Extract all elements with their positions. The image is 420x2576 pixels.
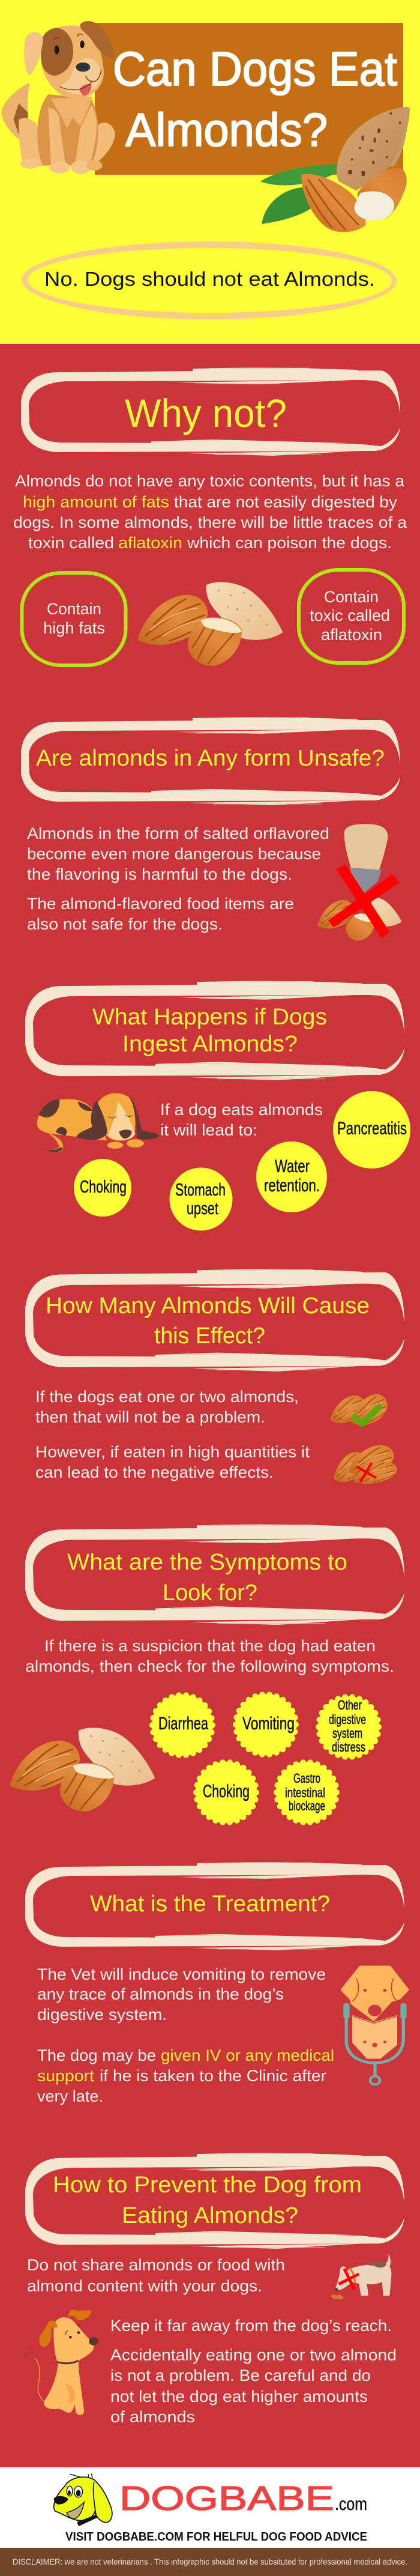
heading: what happens: What Happens if Dogs xyxy=(92,1005,327,1030)
heading: unsafe forms: Are almonds in Any form Unsafe? xyxy=(36,746,385,771)
icon: sitting dog xyxy=(1,21,115,174)
icon: three almonds xyxy=(137,582,283,666)
callout: water retention: Water xyxy=(275,1156,310,1176)
badge: choking: Choking xyxy=(203,1782,250,1801)
icon: vet stethoscope with pets xyxy=(342,1967,407,2084)
badge: gastro intestinal blockage: Gastro xyxy=(293,1771,320,1786)
text block: flavored almonds: become even more dangerous because xyxy=(27,845,321,863)
icon: crossed salt shaker and almonds xyxy=(317,824,402,941)
text block: do not share: Do not share almonds or food with xyxy=(27,2256,285,2274)
text block: do not share: almond content with your dogs. xyxy=(27,2277,262,2295)
text block: flavored almonds: The almond-flavored food items are xyxy=(27,895,294,913)
text block: flavored almonds: Almonds in the form of salted orflavored xyxy=(27,824,329,842)
callout: contain toxic called aflatoxin: toxic called xyxy=(310,606,390,624)
heading: what happens: Ingest Almonds? xyxy=(122,1032,298,1057)
title text: Can Dogs Eat xyxy=(113,42,397,95)
heading: why not: Why not? xyxy=(125,391,287,435)
text block: keep away: not let the dog eat higher amounts xyxy=(110,2387,368,2405)
tagline: VISIT DOGBABE.COM FOR HELFUL DOG FOOD ADVICE xyxy=(65,2530,367,2544)
icon: almonds with green check xyxy=(330,1394,388,1426)
icon: dog sniffing almonds with cross xyxy=(331,2254,391,2299)
icon: almonds with red cross xyxy=(334,1445,397,1484)
callout: stomach upset: upset xyxy=(187,1199,218,1218)
heading: treatment: What is the Treatment? xyxy=(90,1891,330,1917)
heading: prevention: Eating Almonds? xyxy=(122,2203,298,2228)
callout: contain high fats xyxy=(22,573,126,665)
text block: treatment: any trace of almonds in the dog’s xyxy=(37,1985,284,2003)
icon: three almonds xyxy=(10,1728,155,1812)
text block: one or two almonds: then that will not be a problem. xyxy=(35,1408,265,1426)
text block: if a dog eats almonds: it will lead to: xyxy=(160,1121,257,1139)
callout: stomach upset: Stomach xyxy=(175,1181,226,1200)
text block: one or two almonds: If the dogs eat one or two almonds, xyxy=(35,1388,299,1406)
text block: why not explanation: dogs. In some almonds, there will be little traces of a xyxy=(13,513,407,531)
panel: treatment xyxy=(25,1862,407,2105)
panel: how many almonds xyxy=(25,1269,404,1484)
panel: unsafe forms xyxy=(21,717,402,941)
text block: treatment: The dog may be xyxy=(37,2046,156,2064)
icon: sitting dog with collar xyxy=(26,2310,98,2415)
heading: unsafe forms xyxy=(21,717,400,805)
text block: treatment: if he is taken to the Clinic after xyxy=(100,2067,326,2085)
header panel xyxy=(0,0,420,344)
heading: treatment xyxy=(25,1862,404,1950)
badge: choking xyxy=(196,1762,257,1823)
heading: symptoms xyxy=(25,1525,404,1625)
title text xyxy=(113,42,397,156)
heading: why not xyxy=(21,367,400,456)
text block: symptoms intro: almonds, then check for the following symptoms. xyxy=(25,1657,394,1675)
title banner xyxy=(95,23,403,175)
text block: flavored almonds: the flavoring is harmful to the dogs. xyxy=(27,865,292,883)
callout: pancreatitis xyxy=(333,1091,410,1169)
text block: if a dog eats almonds: If a dog eats almonds xyxy=(160,1101,323,1119)
text block: why not explanation: toxin called xyxy=(28,534,114,552)
text block: treatment xyxy=(37,1965,334,2105)
logo wordmark: .com xyxy=(335,2494,367,2514)
callout: choking: Choking xyxy=(80,1178,127,1197)
text block: why not explanation: high amount of fats xyxy=(23,493,169,511)
heading: how many almonds: How Many Almonds Will Cause xyxy=(46,1293,370,1319)
badge: other digestive system distress: Other xyxy=(338,1698,362,1713)
answer callout oval: No. Dogs should not eat Almonds. xyxy=(44,268,375,290)
heading: symptoms: Look for? xyxy=(163,1580,257,1606)
badge: other digestive system distress: digestive xyxy=(329,1712,366,1727)
logo wordmark: DOGBABE xyxy=(119,2479,334,2518)
panel: symptoms xyxy=(10,1525,404,1823)
badge: diarrhea: Diarrhea xyxy=(158,1714,208,1734)
badge: diarrhea xyxy=(152,1695,213,1756)
callout: contain toxic called aflatoxin: aflatoxin xyxy=(321,626,382,644)
title text: Almonds? xyxy=(125,103,328,156)
heading: what happens xyxy=(25,981,404,1080)
text block: if a dog eats almonds xyxy=(160,1101,323,1139)
text block: why not explanation: aflatoxin xyxy=(118,534,182,552)
text block: why not explanation: which can poison the dogs. xyxy=(187,534,392,552)
text block: treatment: support xyxy=(37,2067,95,2085)
text block: keep away: of almonds xyxy=(110,2408,195,2426)
callout: contain toxic called aflatoxin xyxy=(299,570,404,663)
panel: what happens xyxy=(25,981,410,1231)
icon: yellow dog logo xyxy=(54,2474,112,2526)
text block: high quantities xyxy=(35,1443,310,1481)
callout: water retention xyxy=(256,1141,327,1212)
heading: prevention: How to Prevent the Dog from xyxy=(53,2172,362,2198)
badge: other digestive system distress xyxy=(318,1696,379,1758)
text block: symptoms intro: If there is a suspicion that the dog had eaten xyxy=(44,1637,376,1655)
heading: symptoms: What are the Symptoms to xyxy=(67,1550,347,1575)
text block: do not share xyxy=(27,2256,285,2295)
text block: keep away: Keep it far away from the dog’s reach. xyxy=(110,2317,392,2335)
text block: treatment: given IV or any medical xyxy=(161,2046,334,2064)
text block: keep away: is not a problem. Be careful and do xyxy=(110,2366,371,2384)
text block: keep away xyxy=(110,2317,397,2426)
text block: high quantities: can lead to the negative effects. xyxy=(35,1463,274,1481)
heading: how many almonds: this Effect? xyxy=(154,1323,265,1349)
text block: high quantities: However, if eaten in high quantities it xyxy=(35,1443,310,1461)
badge: gastro intestinal blockage: intestinal xyxy=(285,1785,325,1800)
text block: symptoms intro xyxy=(25,1637,394,1675)
badge: gastro intestinal blockage: blockage xyxy=(289,1798,325,1813)
icon: almonds and leaves xyxy=(260,107,410,232)
badge: gastro intestinal blockage xyxy=(276,1762,337,1823)
callout: choking xyxy=(74,1159,131,1217)
answer callout oval xyxy=(22,241,397,319)
panel: why not xyxy=(13,367,407,666)
badge: other digestive system distress: distress xyxy=(332,1740,365,1755)
panel: prevention xyxy=(25,2153,404,2426)
badge: vomiting xyxy=(235,1694,296,1755)
icon: sleeping dog xyxy=(37,1093,160,1152)
text block: why not explanation: Almonds do not have any toxic contents, but it has a xyxy=(15,472,405,490)
text block: why not explanation: that are not easily digested by xyxy=(174,493,398,511)
callout: contain toxic called aflatoxin: Contain xyxy=(324,588,379,606)
footer: brand band xyxy=(0,2467,420,2548)
callout: stomach upset xyxy=(169,1167,233,1231)
disclaimer bar xyxy=(0,2548,420,2576)
callout: water retention: retention. xyxy=(264,1176,320,1196)
callout: contain high fats: high fats xyxy=(43,619,105,637)
text block: flavored almonds: also not safe for the dogs. xyxy=(27,915,223,933)
text block: treatment: The Vet will induce vomiting to remove xyxy=(37,1965,326,1983)
text block: flavored almonds xyxy=(27,824,329,933)
text block: treatment: very late. xyxy=(37,2087,103,2105)
text block: treatment: digestive system. xyxy=(37,2006,167,2024)
callout: contain high fats: Contain xyxy=(47,600,101,618)
text block: keep away: Accidentally eating one or two almond xyxy=(110,2346,397,2364)
badge: vomiting: Vomiting xyxy=(242,1714,295,1734)
heading: how many almonds xyxy=(25,1269,404,1371)
logo wordmark xyxy=(119,2479,367,2518)
heading: prevention xyxy=(25,2153,404,2249)
badge: other digestive system distress: system xyxy=(332,1726,362,1741)
text block: why not explanation xyxy=(13,472,407,552)
text block: one or two almonds xyxy=(35,1388,299,1426)
